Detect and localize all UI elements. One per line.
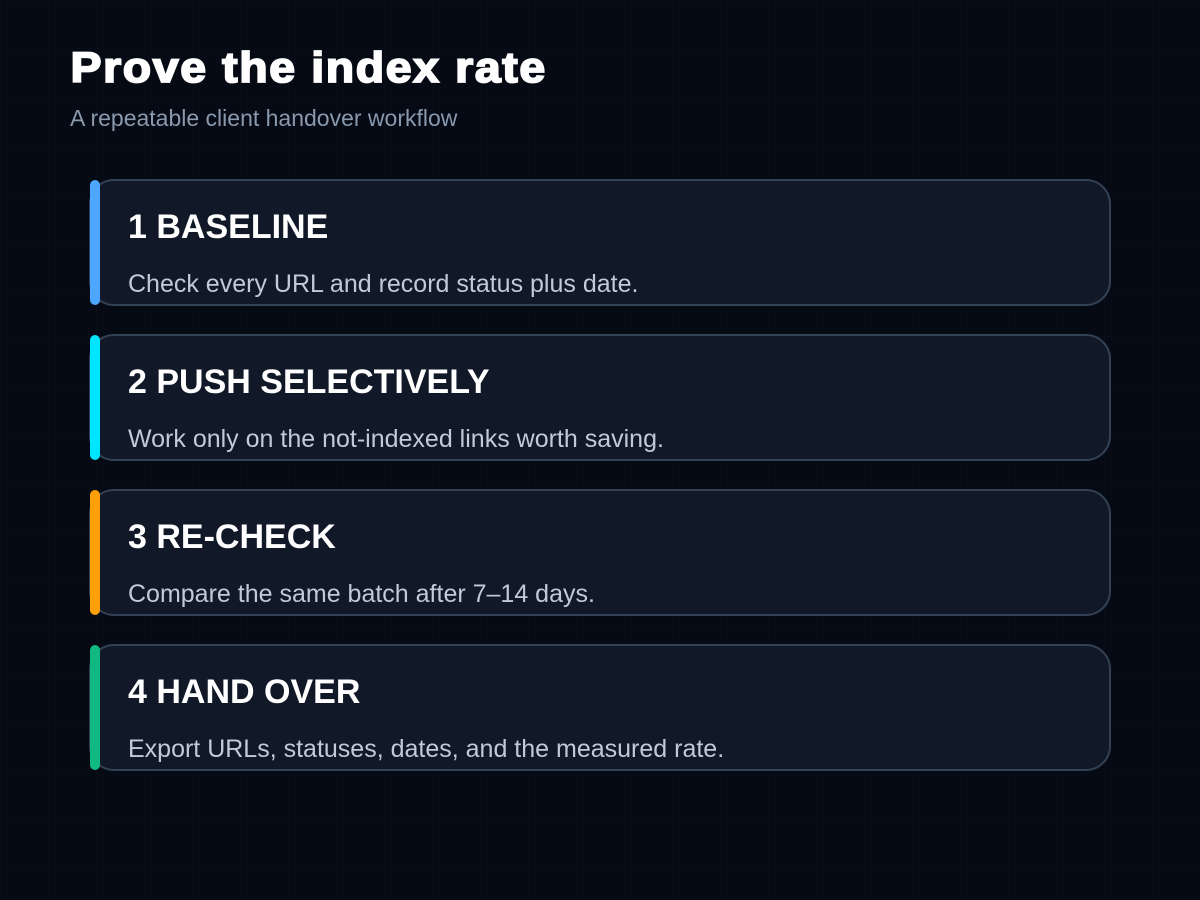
text: step 3: Compare the same batch after 7–14 days.: [128, 580, 595, 608]
text: step 2: Work only on the not-indexed links worth saving.: [128, 425, 664, 453]
panel: step 1 baseline: [90, 180, 1110, 305]
heading: step 1: 1 BASELINE: [128, 208, 328, 246]
heading: step 4: 4 HAND OVER: [128, 673, 360, 711]
accent bar: step 4: [90, 645, 100, 770]
panel: step 4 hand over: [90, 645, 1110, 770]
subtitle: A repeatable client handover workflow: [70, 105, 458, 131]
heading: step 3: 3 RE-CHECK: [128, 518, 336, 556]
accent bar: step 1: [90, 180, 100, 305]
heading: step 2: 2 PUSH SELECTIVELY: [128, 363, 490, 401]
text: step 1: Check every URL and record status plus date.: [128, 270, 638, 298]
accent bar: step 2: [90, 335, 100, 460]
text: step 4: Export URLs, statuses, dates, and the measured rate.: [128, 735, 724, 763]
panel: step 3 re-check: [90, 490, 1110, 615]
accent bar: step 3: [90, 490, 100, 615]
panel: step 2 push selectively: [90, 335, 1110, 460]
title: Prove the index rate: [70, 44, 547, 92]
